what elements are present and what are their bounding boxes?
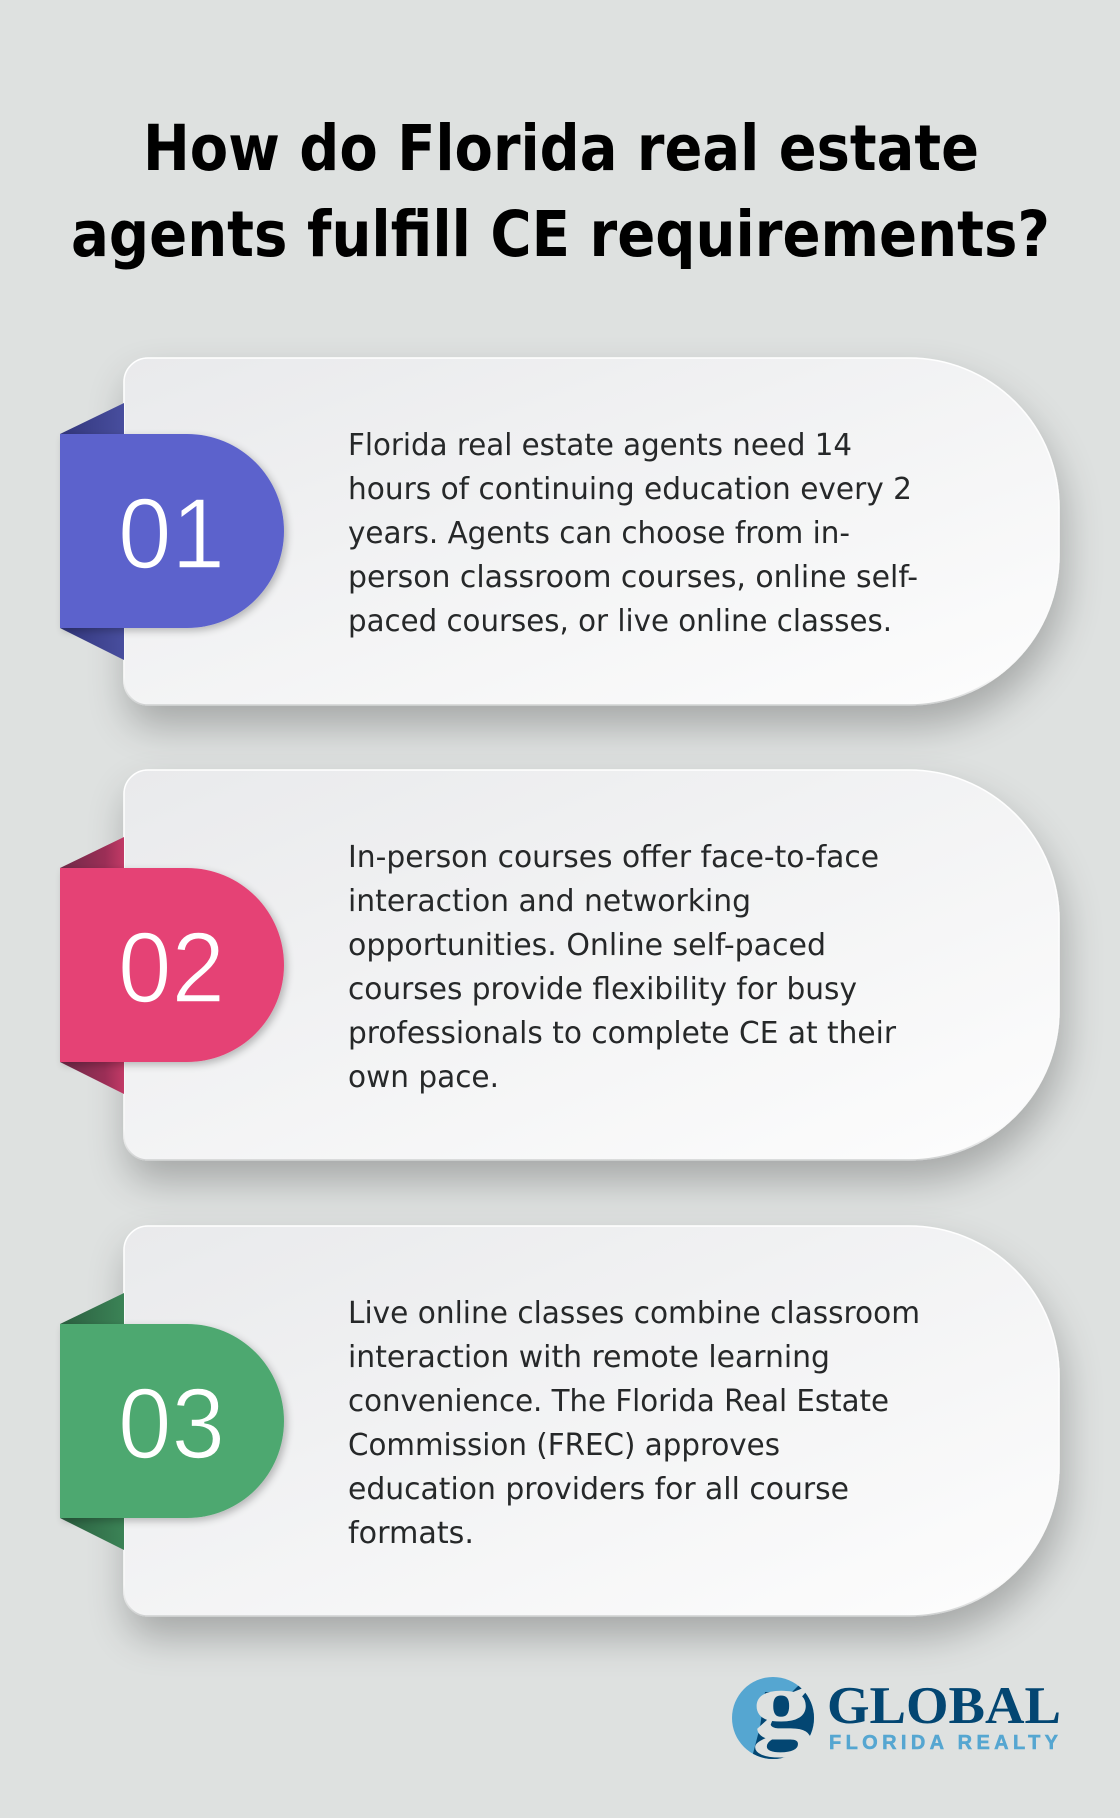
step 1 text: hours of continuing education every 2 bbox=[348, 472, 912, 507]
ribbon folds 2 bbox=[60, 837, 124, 1094]
icon: logo circle with g: g bbox=[752, 1650, 812, 1757]
number 01: 01 bbox=[118, 478, 225, 590]
step 3 text: Commission (FREC) approves bbox=[348, 1428, 780, 1463]
number 03: 03 bbox=[118, 1368, 225, 1480]
step 3 text: convenience. The Florida Real Estate bbox=[348, 1384, 889, 1419]
step 3 text: interaction with remote learning bbox=[348, 1340, 830, 1375]
card 2 background bbox=[124, 770, 1059, 1160]
title bbox=[71, 112, 1050, 271]
step 2 text bbox=[348, 840, 896, 1095]
panel: step 2 bbox=[60, 770, 1059, 1160]
step 1 text: years. Agents can choose from in- bbox=[348, 516, 850, 551]
step 3 text: Live online classes combine classroom bbox=[348, 1296, 920, 1331]
step 2 text: opportunities. Online self-paced bbox=[348, 928, 826, 963]
logo subtitle FLORIDA REALTY: FLORIDA REALTY bbox=[829, 1732, 1059, 1754]
step 2 text: professionals to complete CE at their bbox=[348, 1016, 896, 1051]
ribbon folds 1 bbox=[60, 403, 124, 660]
step 1 text bbox=[348, 428, 918, 639]
number badge 3 bbox=[60, 1324, 284, 1518]
card 3 background bbox=[124, 1226, 1059, 1616]
panel: step 1 bbox=[60, 358, 1059, 705]
step 3 text: education providers for all course bbox=[348, 1472, 849, 1507]
step 2 text: interaction and networking bbox=[348, 884, 751, 919]
panel: step 3 bbox=[60, 1226, 1059, 1616]
step 1 text: person classroom courses, online self- bbox=[348, 560, 918, 595]
step 2 text: own pace. bbox=[348, 1060, 499, 1095]
step 3 text bbox=[348, 1296, 920, 1551]
icon: logo circle with g bbox=[732, 1677, 814, 1759]
title: How do Florida real estate bbox=[143, 112, 979, 185]
step 2 text: In-person courses offer face-to-face bbox=[348, 840, 879, 875]
number 02: 02 bbox=[118, 912, 225, 1024]
number badge 1 bbox=[60, 434, 284, 628]
step 3 text: formats. bbox=[348, 1516, 474, 1551]
step 1 text: Florida real estate agents need 14 bbox=[348, 428, 852, 463]
step 1 text: paced courses, or live online classes. bbox=[348, 604, 892, 639]
card 1 background bbox=[124, 358, 1059, 705]
logo bbox=[732, 1677, 1059, 1759]
number badge 2 bbox=[60, 868, 284, 1062]
logo wordmark GLOBAL: GLOBAL bbox=[827, 1677, 1061, 1735]
step 2 text: courses provide flexibility for busy bbox=[348, 972, 857, 1007]
ribbon folds 3 bbox=[60, 1293, 124, 1550]
